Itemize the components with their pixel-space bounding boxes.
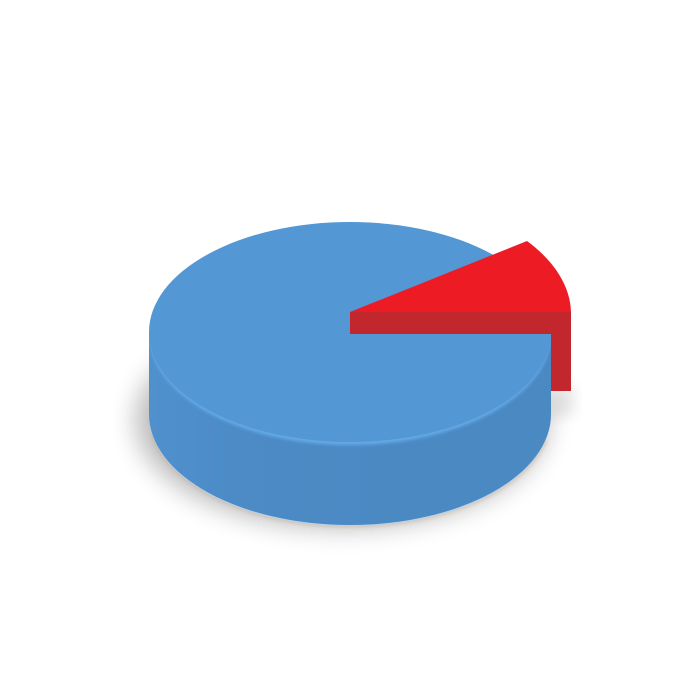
blue pie top face <box>149 222 551 445</box>
red slice <box>350 241 571 391</box>
blue pie body side wall <box>149 333 551 526</box>
red slice side wall <box>350 312 571 391</box>
red slice top face <box>350 241 571 312</box>
3D pie chart <box>123 222 577 542</box>
drop shadow <box>136 312 574 528</box>
